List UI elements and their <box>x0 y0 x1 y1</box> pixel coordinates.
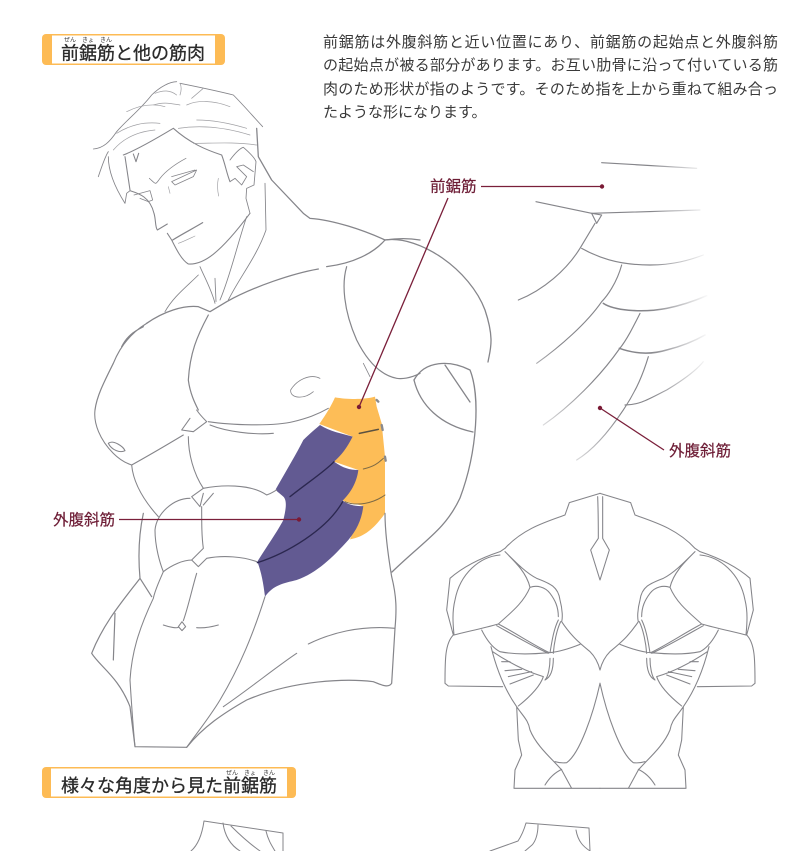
callout: external oblique label on torso: 外腹斜筋 <box>53 511 115 529</box>
heading: serratus from various angles: きょ <box>244 770 256 777</box>
muscles: serratus anterior in orange and external oblique in purple <box>257 397 386 597</box>
heading: serratus and other muscles: 前鋸筋と他の筋肉 <box>61 44 205 64</box>
heading: serratus and other muscles: きょ <box>82 37 94 44</box>
callout: external oblique label on torso <box>53 511 301 529</box>
illustration: partial torso, right <box>490 823 590 851</box>
illustration: partial torso, left <box>191 821 283 851</box>
heading: serratus from various angles: きん <box>263 770 275 777</box>
illustration: back view of torso <box>445 493 755 788</box>
heading: serratus and other muscles: きん <box>100 37 112 44</box>
callout: serratus label on torso and ribs <box>357 178 604 409</box>
shoulder and arm lines <box>385 240 491 572</box>
heading: serratus and other muscles <box>42 34 225 65</box>
heading: serratus from various angles: ぜん <box>226 770 238 777</box>
callout: external oblique label on ribs <box>598 406 731 460</box>
heading: serratus from various angles: 様々な角度から見た前鋸筋 <box>61 776 277 796</box>
callout: serratus label on torso and ribs: 前鋸筋 <box>430 178 477 196</box>
abdomen and lower torso lines <box>92 408 396 747</box>
text block: explanation: 肉のため形状が指のようです。そのため指を上から重ねて組み合っ <box>323 81 778 98</box>
muscle division lines <box>257 400 386 563</box>
text block: explanation <box>323 34 778 121</box>
illustration: ribs and muscle close-up <box>510 155 710 470</box>
callout: external oblique label on ribs: 外腹斜筋 <box>669 442 731 460</box>
text block: explanation: の起始点が被る部分があります。お互い肋骨に沿って付いている筋 <box>323 57 778 74</box>
text block: explanation: 前鋸筋は外腹斜筋と近い位置にあり、前鋸筋の起始点と外腹斜筋 <box>323 34 778 51</box>
external oblique muscle <box>257 425 363 597</box>
heading: serratus from various angles <box>42 767 296 798</box>
text block: explanation: たような形になります。 <box>323 104 487 121</box>
head and upper chest lines <box>93 82 420 410</box>
serratus anterior muscle <box>319 397 385 539</box>
illustration: male torso with coloured muscles <box>92 82 491 747</box>
heading: serratus and other muscles: ぜん <box>64 37 76 44</box>
